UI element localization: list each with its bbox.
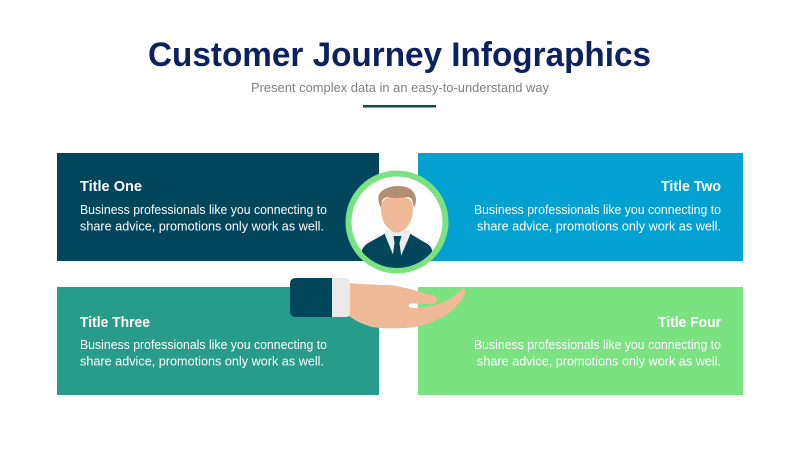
panel three body: Business professionals like you connecting to <box>80 338 327 352</box>
title: Customer Journey Infographics <box>148 36 651 74</box>
panel: title four <box>418 287 743 395</box>
panel three body: share advice, promotions only work as well. <box>80 354 324 368</box>
panel four heading: Title Four <box>658 314 721 331</box>
panel four body <box>474 338 721 368</box>
panel one body: share advice, promotions only work as well. <box>80 220 324 234</box>
panel two body: share advice, promotions only work as well. <box>477 220 721 234</box>
icon: businessman in circle <box>348 174 446 270</box>
panel four body: Business professionals like you connecting to <box>474 338 721 352</box>
panel: title one <box>57 153 379 261</box>
panel: title two <box>418 153 743 261</box>
panel four body: share advice, promotions only work as well. <box>477 354 721 368</box>
panel one heading: Title One <box>80 178 142 195</box>
panel two body: Business professionals like you connecting to <box>474 203 721 217</box>
panel two heading: Title Two <box>661 178 721 195</box>
panel one body <box>80 203 327 234</box>
panel two body <box>474 203 721 234</box>
panel: title three <box>57 287 379 395</box>
icon: open hand with sleeve <box>290 278 466 328</box>
panel three heading: Title Three <box>80 314 150 331</box>
subtitle: Present complex data in an easy-to-understand way <box>251 80 549 95</box>
panel one body: Business professionals like you connecting to <box>80 203 327 217</box>
title underline <box>363 105 436 108</box>
panel three body <box>80 338 327 368</box>
